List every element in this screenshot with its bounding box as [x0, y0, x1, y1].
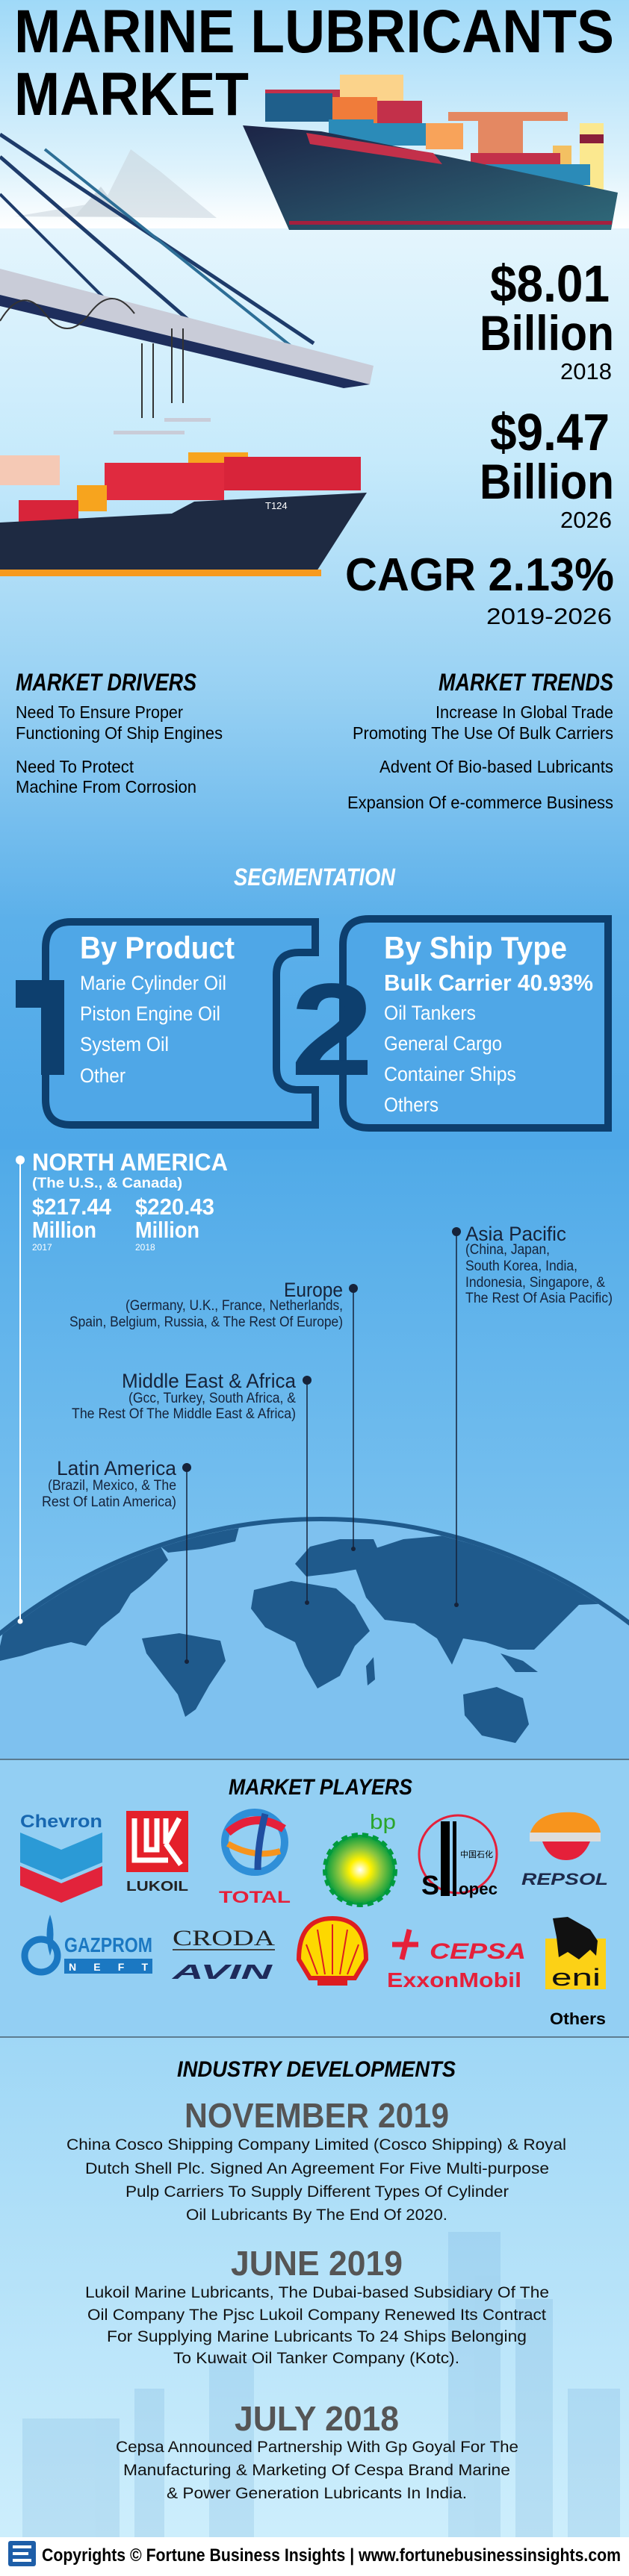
region: europe: Spain, Belgium, Russia, & The Rest Of Europe): [69, 1314, 343, 1330]
panel: market trends: Advent Of Bio-based Lubricants: [379, 757, 613, 776]
number 2: 2: [291, 957, 374, 1103]
stat: 2018 value: Billion: [480, 305, 614, 361]
panel: by product: By Product: [80, 930, 235, 965]
title: MARKET: [14, 60, 249, 128]
city skyline: [22, 2232, 620, 2538]
region: asia pacific: (China, Japan,: [465, 1242, 550, 1258]
illustration: container ship (bottom): T124: [265, 500, 288, 511]
region: north america: 2018: [135, 1242, 155, 1253]
heading: industry developments: INDUSTRY DEVELOPMENTS: [177, 2057, 456, 2082]
region: north america: Million: [135, 1217, 199, 1243]
background sky: [0, 0, 629, 228]
panel: market drivers: MARKET DRIVERS: [16, 669, 197, 696]
logo: sinopec: [419, 1815, 498, 1900]
icon: fbi logo: [8, 2541, 36, 2566]
development: june 2019: Oil Company The Pjsc Lukoil Company Renewed Its Contract: [87, 2307, 546, 2324]
panel: market drivers: [16, 669, 223, 796]
stat: 2026 value: $9.47: [490, 403, 610, 461]
panel: by ship type: Others: [384, 1094, 439, 1116]
logo: total: [219, 1812, 291, 1906]
logo: chevron: Chevron: [20, 1812, 102, 1832]
region: latin america: Latin America: [57, 1457, 177, 1479]
panel: by ship type: Bulk Carrier 40.93%: [384, 970, 593, 996]
illustration: container ship (bottom): [0, 452, 367, 576]
panel: market trends: Expansion Of e-commerce Business: [347, 793, 613, 812]
region: middle east & africa: The Rest Of The Middle East & Africa): [72, 1406, 296, 1422]
development: june 2019: Lukoil Marine Lubricants, The Dubai-based Subsidiary Of The: [85, 2284, 549, 2301]
stat: 2026 value: 2026: [560, 507, 612, 533]
region: asia pacific: [452, 1223, 613, 1607]
logo: bp: bp: [370, 1810, 396, 1833]
logo: shell: [299, 1918, 366, 1986]
development: june 2019: To Kuwait Oil Tanker Company (Kotc).: [173, 2350, 459, 2367]
region: middle east & africa: (Gcc, Turkey, South Africa, &: [128, 1391, 296, 1406]
development: july 2018: Cepsa Announced Partnership With Gp Goyal For The: [116, 2439, 518, 2456]
region: middle east & africa: [72, 1370, 312, 1605]
development: july 2018: & Power Generation Lubricants In India.: [167, 2485, 467, 2502]
panel: by product: Other: [80, 1064, 126, 1087]
region: latin america: (Brazil, Mexico, & The: [48, 1478, 176, 1494]
logo: lukoil: [126, 1811, 188, 1894]
region: latin america: Rest Of Latin America): [42, 1494, 176, 1510]
development: november 2019: NOVEMBER 2019: [185, 2096, 449, 2135]
panel: market drivers: Need To Ensure Proper: [16, 702, 183, 722]
development: november 2019: Pulp Carriers To Supply Different Types Of Cylinder: [126, 2183, 509, 2201]
illustration: cargo ship (top): [243, 75, 618, 230]
logo: sinopec: S: [421, 1870, 439, 1900]
logo: cepsa and exxonmobil: [387, 1930, 526, 1992]
panel: by ship type: By Ship Type: [384, 930, 567, 965]
stat: 2018 value: [480, 255, 614, 384]
development: november 2019: Oil Lubricants By The End Of 2020.: [186, 2207, 447, 2224]
logo: cepsa and exxonmobil: CEPSA: [430, 1939, 526, 1964]
heading: market players: MARKET PLAYERS: [229, 1775, 412, 1800]
logo: gazprom neft: [25, 1915, 152, 1974]
region: north america: NORTH AMERICA: [32, 1149, 228, 1176]
heading: segmentation: SEGMENTATION: [234, 864, 396, 891]
panel: by ship type: Container Ships: [384, 1063, 516, 1085]
development: july 2018: Manufacturing & Marketing Of Cespa Brand Marine: [123, 2462, 510, 2479]
mountains: [15, 149, 590, 218]
panel: market trends: [347, 669, 614, 812]
panel: market trends: Promoting The Use Of Bulk Carriers: [353, 723, 613, 743]
region: europe: Europe: [284, 1279, 343, 1301]
region: asia pacific: Indonesia, Singapore, &: [465, 1275, 605, 1291]
logo: lukoil: LUKOIL: [126, 1879, 188, 1894]
continents: [0, 1527, 629, 1743]
background players: [0, 1759, 629, 2037]
logo: cepsa and exxonmobil: ExxonMobil: [387, 1968, 521, 1992]
logo: gazprom neft: GAZPROM: [64, 1933, 152, 1956]
panel: market drivers: Machine From Corrosion: [16, 777, 196, 796]
footer: [0, 2537, 629, 2576]
panel: by ship type: General Cargo: [384, 1032, 502, 1055]
panel: by product: System Oil: [80, 1033, 169, 1055]
logo: total: TOTAL: [219, 1888, 291, 1906]
panel: by product: Piston Engine Oil: [80, 1002, 220, 1025]
development: november 2019: [66, 2096, 566, 2224]
illustration: crane: [0, 134, 374, 434]
logo: croda and avin: [171, 1926, 275, 1983]
logo: chevron: [20, 1812, 102, 1903]
region: north america: $220.43: [135, 1194, 214, 1220]
panel: market drivers: Functioning Of Ship Engines: [16, 723, 223, 743]
panel: market drivers: Need To Protect: [16, 757, 134, 776]
region: europe: (Germany, U.K., France, Netherlands,: [126, 1298, 343, 1314]
logo: croda and avin: AVIN: [171, 1960, 273, 1983]
logo: repsol: REPSOL: [521, 1870, 608, 1889]
logo: eni: [545, 1917, 606, 1991]
region: asia pacific: South Korea, India,: [465, 1259, 577, 1274]
logo: bp: [325, 1810, 396, 1905]
logo: sinopec: opec: [459, 1880, 498, 1898]
panel: by product: Marie Cylinder Oil: [80, 972, 226, 994]
logo: repsol: [521, 1812, 608, 1889]
region: north america: (The U.S., & Canada): [32, 1176, 182, 1191]
region: north america: [16, 1149, 228, 1624]
development: november 2019: China Cosco Shipping Company Limited (Cosco Shipping) & Royal: [66, 2136, 566, 2154]
development: july 2018: JULY 2018: [235, 2399, 399, 2438]
background sea and segmentation: [0, 228, 629, 1150]
region: middle east & africa: Middle East & Africa: [122, 1370, 297, 1392]
stat: CAGR: [345, 549, 614, 629]
text: others: Others: [550, 2009, 606, 2028]
region: latin america: [42, 1457, 191, 1664]
development: june 2019: For Supplying Marine Lubricants To 24 Ships Belonging: [107, 2328, 527, 2345]
panel: market trends: Increase In Global Trade: [436, 702, 613, 722]
world map globe: [0, 1517, 629, 1759]
logo: eni: eni: [551, 1964, 601, 1991]
region: europe: [69, 1279, 358, 1551]
stat: 2018 value: $8.01: [490, 255, 610, 313]
region: north america: 2017: [32, 1242, 52, 1253]
panel: by ship type: Oil Tankers: [384, 1002, 476, 1024]
region: north america: Million: [32, 1217, 96, 1243]
stat: 2018 value: 2018: [560, 358, 612, 384]
logo: sinopec: 中国石化: [460, 1848, 493, 1860]
development: june 2019: JUNE 2019: [231, 2244, 403, 2283]
background developments: [0, 2037, 629, 2537]
region: asia pacific: Asia Pacific: [465, 1223, 566, 1245]
development: november 2019: Dutch Shell Plc. Signed An Agreement For Five Multi-purpose: [85, 2160, 549, 2177]
panel: by product: [16, 922, 315, 1125]
number 1: [16, 980, 64, 1075]
stat: CAGR: 2019-2026: [486, 603, 612, 629]
logo: gazprom neft: NEFT: [69, 1961, 148, 1973]
stat: 2026 value: Billion: [480, 454, 614, 509]
region: north america: $217.44: [32, 1194, 112, 1220]
background map: [0, 1150, 629, 1759]
logo: croda and avin: CRODA: [173, 1926, 275, 1950]
panel: by ship type: [291, 919, 608, 1128]
title: [14, 0, 614, 128]
development: june 2019: [85, 2244, 549, 2367]
stat: CAGR: CAGR 2.13%: [345, 549, 614, 601]
stat: 2026 value: [480, 403, 614, 533]
development: july 2018: [116, 2399, 518, 2502]
region: asia pacific: The Rest Of Asia Pacific): [465, 1291, 613, 1306]
